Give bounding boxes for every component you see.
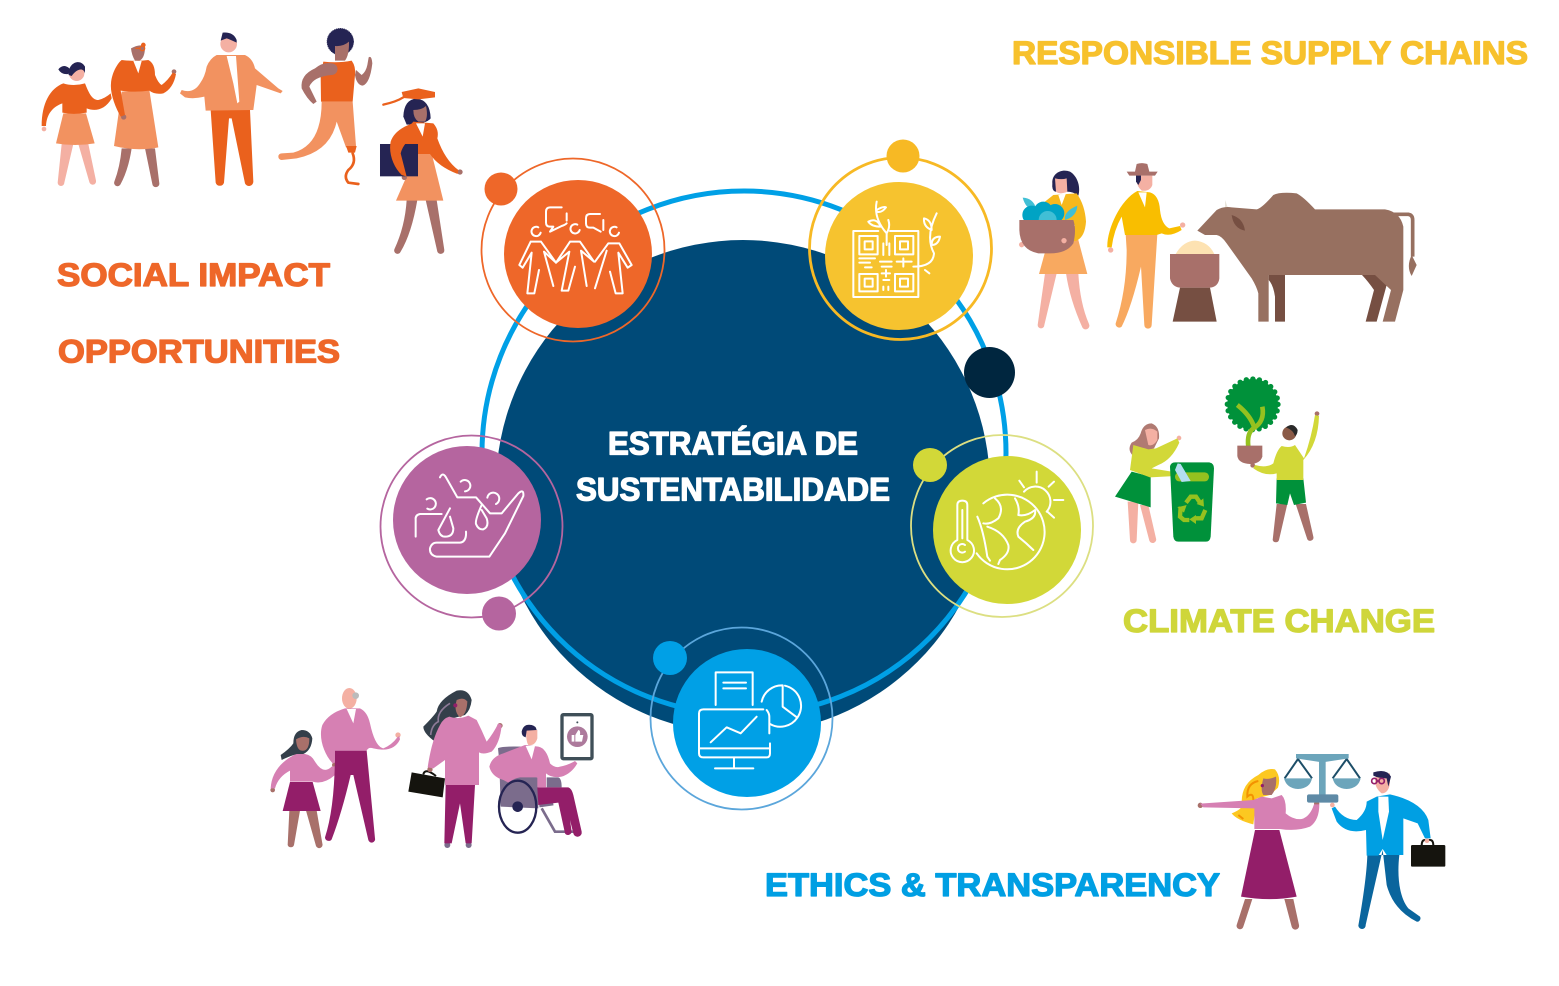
man with plant bbox=[1250, 411, 1319, 542]
illustration: ethics and transparency people bbox=[1198, 754, 1445, 930]
cow bbox=[1197, 193, 1417, 322]
heading: responsible supply chains: RESPONSIBLE SUPPLY CHAINS bbox=[1012, 35, 1528, 71]
heading: opportunities: OPPORTUNITIES bbox=[58, 334, 340, 370]
badge: social impact bbox=[482, 158, 664, 342]
center title bbox=[576, 426, 890, 508]
center title: ESTRATÉGIA DE bbox=[608, 426, 858, 462]
badge: ethics and transparency bbox=[650, 628, 832, 810]
scales of justice bbox=[1284, 754, 1361, 803]
badge: responsible supply chains bbox=[810, 140, 992, 340]
badge: climate change bbox=[911, 435, 1093, 617]
woman with basket bbox=[1019, 171, 1089, 329]
woman with briefcase bbox=[408, 690, 503, 848]
tablet with thumbs up bbox=[562, 715, 592, 759]
heading: climate change: CLIMATE CHANGE bbox=[1123, 603, 1435, 639]
heading: social impact: SOCIAL IMPACT bbox=[57, 257, 330, 293]
girl bbox=[270, 730, 338, 848]
icon: people talking bbox=[519, 207, 632, 293]
center title: SUSTENTABILIDADE bbox=[576, 472, 890, 508]
light blue orbit ring bbox=[482, 191, 1006, 715]
man in jacket bbox=[180, 33, 283, 186]
woman with glasses bbox=[111, 43, 176, 187]
badge: opportunities bbox=[380, 436, 562, 630]
icon: monitor chart document pie bbox=[699, 672, 801, 768]
icon: globe thermometer sun bbox=[951, 472, 1063, 569]
woman bbox=[1198, 769, 1319, 930]
illustration: climate change people bbox=[1115, 379, 1319, 543]
farmer with hat bbox=[1107, 163, 1185, 329]
man with briefcase bbox=[1330, 771, 1445, 929]
illustration: social impact people bbox=[42, 28, 463, 254]
girl bbox=[42, 62, 112, 186]
central navy circle bbox=[496, 240, 990, 734]
graduate bbox=[380, 88, 463, 254]
dark navy accent dot bbox=[964, 347, 1015, 398]
woman recycling bbox=[1115, 423, 1181, 543]
illustration: supply chain farmers and cow bbox=[1019, 163, 1417, 329]
icon: people with hands and ribbon bbox=[416, 474, 523, 557]
heading: ethics and transparency: ETHICS & TRANSPARENCY bbox=[765, 867, 1220, 903]
man in wheelchair bbox=[489, 715, 592, 837]
tree in pot bbox=[1227, 379, 1278, 464]
older man bbox=[321, 688, 401, 843]
feed trough bbox=[1170, 241, 1219, 322]
person with prosthetic leg bbox=[278, 28, 372, 184]
icon: QR code with plant bbox=[853, 202, 940, 297]
illustration: opportunities people bbox=[270, 688, 592, 848]
recycling bin bbox=[1170, 462, 1214, 542]
